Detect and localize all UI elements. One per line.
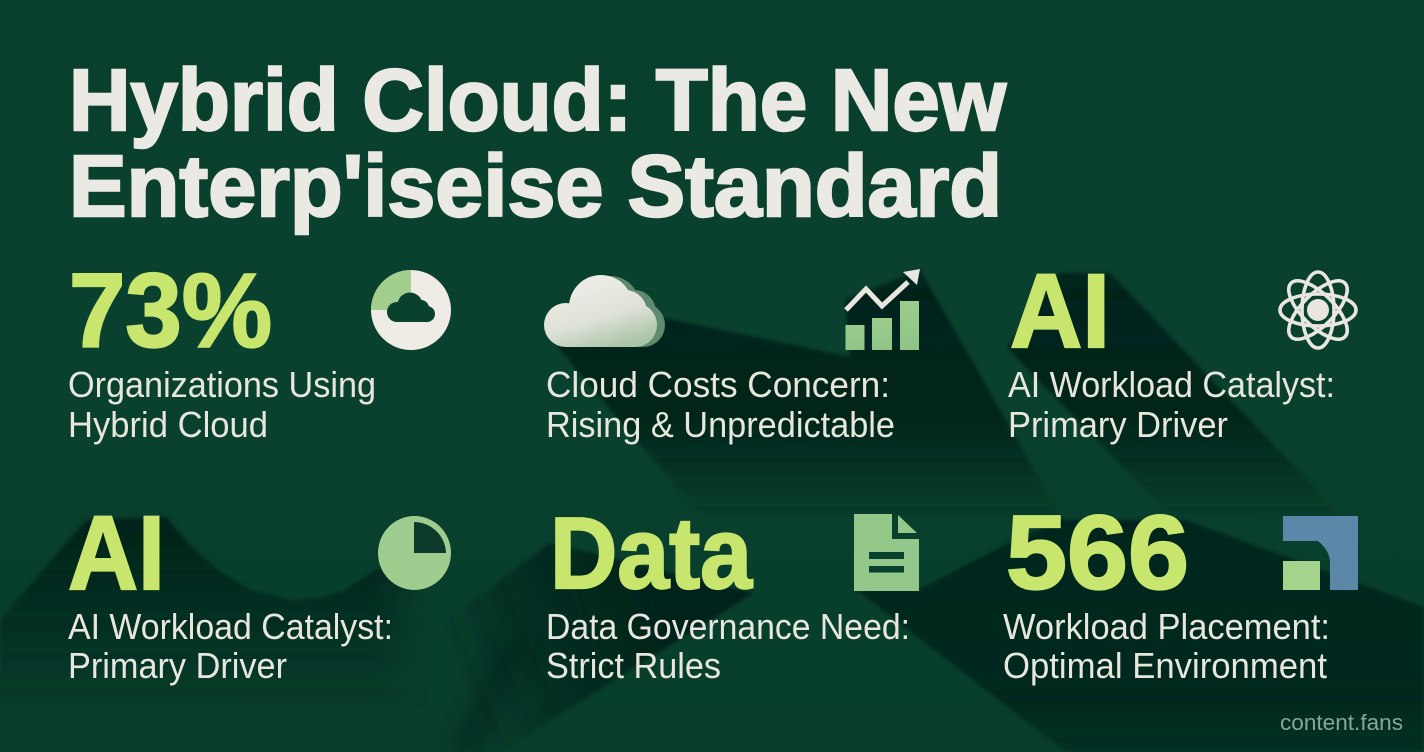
stat: 566: 566: [1006, 494, 1189, 612]
label: cloud costs: [546, 364, 895, 445]
label: data governance: Strict Rules: [546, 645, 721, 686]
panel: cloud costs concern: [544, 269, 920, 445]
stat: AI bottom: AI: [68, 495, 165, 612]
label: cloud costs: Rising & Unpredictable: [546, 404, 895, 445]
panel: organizations using hybrid cloud: [68, 252, 451, 445]
watermark: content.fans: [1280, 710, 1403, 735]
icon: growth chart: [846, 269, 920, 350]
label: workload placement: Workload Placement:: [1003, 606, 1330, 647]
label: cloud costs: Cloud Costs Concern:: [546, 364, 890, 405]
label: organizations: [68, 364, 376, 445]
panel: AI workload catalyst bottom: [68, 495, 451, 686]
label: data governance: Data Governance Need:: [546, 606, 910, 647]
stat: 73%: 73%: [69, 252, 272, 370]
icon: atom: [1280, 272, 1356, 348]
panel: AI workload catalyst top: [1008, 253, 1356, 445]
label: data governance: [546, 606, 910, 686]
icon: placement blocks: [1283, 516, 1358, 590]
label: AI workload bottom: AI Workload Catalyst:: [68, 606, 393, 647]
icon: document: [854, 514, 919, 591]
label: AI workload: AI Workload Catalyst:: [1008, 364, 1335, 405]
panel: data governance: [546, 498, 919, 686]
stat: Data: Data: [550, 498, 753, 610]
title: [69, 52, 1006, 235]
label: AI workload bottom: [68, 606, 393, 686]
icon: large cloud: [544, 275, 665, 347]
icon: pie chart: [378, 516, 451, 590]
label: AI workload: [1008, 364, 1335, 445]
label: workload placement: Optimal Environment: [1003, 645, 1327, 686]
icon: donut with cloud: [371, 270, 451, 350]
panel: workload placement: [1003, 494, 1358, 686]
title: Hybrid Cloud: The New: [69, 52, 1006, 149]
long shadows: [0, 270, 1424, 752]
label: AI workload: Primary Driver: [1008, 404, 1228, 445]
label: organizations: Organizations Using: [68, 364, 376, 405]
title: Enterp'iseise Standard: [69, 138, 1002, 235]
label: AI workload bottom: Primary Driver: [68, 645, 287, 686]
label: organizations: Hybrid Cloud: [68, 404, 268, 445]
label: workload placement: [1003, 606, 1330, 686]
stat: AI: AI: [1010, 253, 1110, 370]
